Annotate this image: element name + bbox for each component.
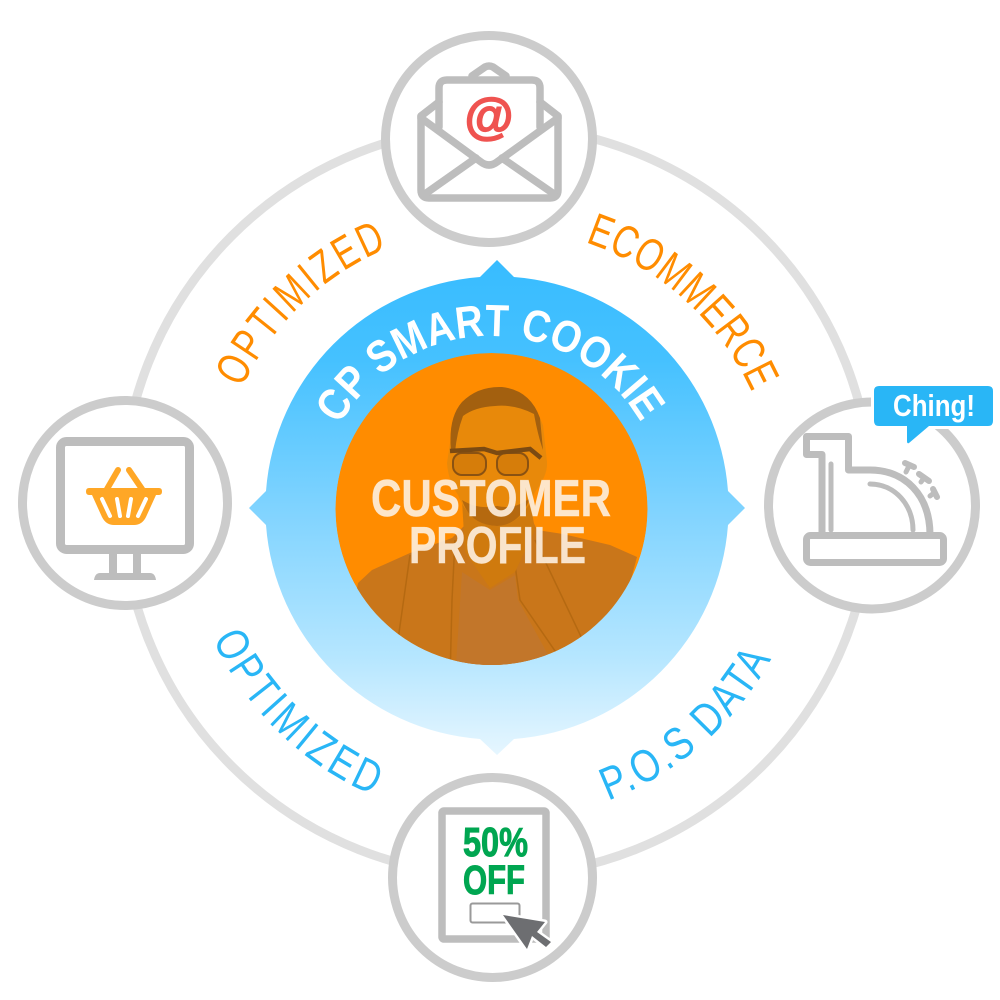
icon: button (470, 904, 520, 922)
icon: coupon page (442, 811, 546, 939)
coupon text: OFF (463, 857, 525, 903)
customer photo circle (336, 353, 660, 680)
neck (462, 500, 535, 588)
t-shirt (456, 572, 548, 665)
node: online shop monitor (22, 400, 228, 606)
coupon text: 50% (463, 819, 528, 865)
center text: customer profile: CUSTOMER (371, 470, 611, 528)
node: 50% off coupon (392, 778, 592, 978)
callout: Ching: Ching! (893, 388, 975, 423)
icon: at sign: @ (465, 88, 513, 144)
icon: cursor (503, 915, 551, 949)
face (447, 406, 547, 522)
node: cash register (768, 386, 993, 609)
node: email (386, 36, 592, 242)
outer ring (122, 126, 872, 876)
label: ECOMMERCE: ECOMMERCE (588, 213, 780, 391)
beard (462, 498, 530, 526)
label: OPTIMIZED blue: OPTIMIZED (217, 630, 380, 790)
torso (357, 523, 637, 665)
icon: basket (86, 470, 162, 525)
hair (450, 387, 543, 452)
center text: customer profile: PROFILE (409, 517, 586, 575)
coupon text (463, 819, 528, 903)
callout: Ching (874, 386, 993, 443)
curved title: CP SMART COOKIE: CP SMART COOKIE (318, 304, 666, 421)
icon: monitor (60, 442, 190, 580)
glasses (450, 449, 541, 475)
label: OPTIMIZED orange: OPTIMIZED (218, 224, 382, 382)
center text: customer profile (371, 470, 611, 575)
central blue disc (249, 260, 745, 755)
label: P.O.S DATA: P.O.S DATA (598, 652, 772, 800)
icon: register (806, 436, 944, 562)
icon: envelope (421, 66, 558, 198)
